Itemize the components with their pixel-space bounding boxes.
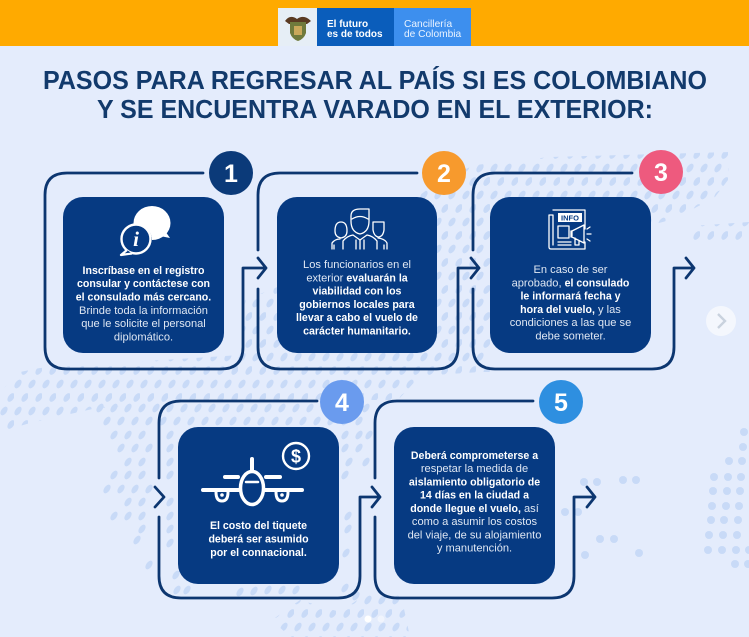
text 5: respetar la medida de [421,463,528,475]
text 1: el consulado más cercano. [76,292,211,304]
text 4: por el connacional. [210,547,307,559]
badge 4 [320,380,364,424]
text 2: exterior evaluarán la [306,272,408,284]
text 2 [296,259,418,338]
logo: El futuro es de todos [317,8,394,46]
text 4: El costo del tiquete [210,520,307,532]
title: Y SE ENCUENTRA VARADO EN EL EXTERIOR: [97,96,653,124]
text 1: Inscríbase en el registro [83,265,205,277]
header bar [0,0,749,46]
text 5: donde llegue el vuelo, así [410,503,540,515]
badge 3: 3 [654,159,668,187]
badge 5 [539,380,583,424]
card 2 [277,197,437,353]
text 1: diplomático. [114,332,173,344]
badge 5: 5 [554,389,568,417]
badge 2: 2 [437,160,451,188]
logo: Cancillería de Colombia: de Colombia [404,29,462,40]
icon: airplane with dollar [203,443,309,504]
text 5: del viaje, de su alojamiento [408,530,541,542]
carousel dots [364,616,384,622]
text 4 [208,520,309,559]
connector arrow 2 [258,173,479,369]
text 3: le informará fecha y [520,290,621,302]
text 5: y manutención. [437,542,512,554]
badge 1 [209,151,253,195]
connector arrow 4 [155,401,380,598]
text 3: hora del vuelo, y las [520,304,621,316]
text 3: condiciones a las que se [510,317,631,329]
logo: El futuro es de todos: es de todos [327,29,383,40]
step 4 panel [155,380,380,598]
icon: airplane with dollar: $ [291,446,301,466]
next button [706,306,736,336]
badge 3 [639,150,683,194]
card 5 [394,427,555,584]
icon: newspaper: INFO [561,214,579,222]
text 3: aprobado, el consulado [512,278,630,290]
logo: El futuro es de todos: El futuro [327,19,368,30]
step 5 panel [375,380,595,598]
text 1: Brinde toda la información [79,305,208,317]
step 1 panel [45,151,266,369]
logo: Cancillería de Colombia [394,8,471,46]
logo: coat of arms [278,8,317,46]
title [43,66,707,124]
icon: speech bubbles [120,206,170,256]
text 3: debe someter. [535,330,606,342]
badge 2 [422,151,466,195]
text 3: En caso de ser [534,264,608,276]
text 5: 14 días en la ciudad a [420,490,529,502]
connector arrow 1 [45,173,266,369]
card 1 [63,197,224,353]
logo: Cancillería de Colombia: Cancillería [404,19,452,30]
icon: team [332,209,387,249]
icon: speech bubbles: i [133,227,139,251]
text 1: que le solicite el personal [81,318,206,330]
step 3 panel [473,150,694,369]
card 3 [490,197,651,353]
icon: newspaper [549,210,591,249]
card 4 [178,427,339,584]
dotted world map [0,152,749,637]
text 1: consular y contáctese con [77,278,210,290]
text 5: Deberá comprometerse a [411,450,538,462]
text 2: carácter humanitario. [303,326,411,338]
badge 4: 4 [335,389,349,417]
text 5 [408,450,541,554]
text 2: gobiernos locales para [299,299,415,311]
connector arrow 5 [375,401,595,598]
text 2: llevar a cabo el vuelo de [296,312,418,324]
text 1 [76,265,211,344]
text 5: como a asumir los costos [412,516,538,528]
connector arrow 3 [473,173,694,369]
text 2: viabilidad con los [313,286,402,298]
text 5: aislamiento obligatorio de [409,476,540,488]
step 2 panel [258,151,479,369]
text 4: deberá ser asumido [208,534,309,546]
text 3 [510,264,631,342]
text 2: Los funcionarios en el [303,259,411,271]
badge 1: 1 [224,160,238,188]
title: PASOS PARA REGRESAR AL PAÍS SI ES COLOMBIANO [43,66,707,95]
